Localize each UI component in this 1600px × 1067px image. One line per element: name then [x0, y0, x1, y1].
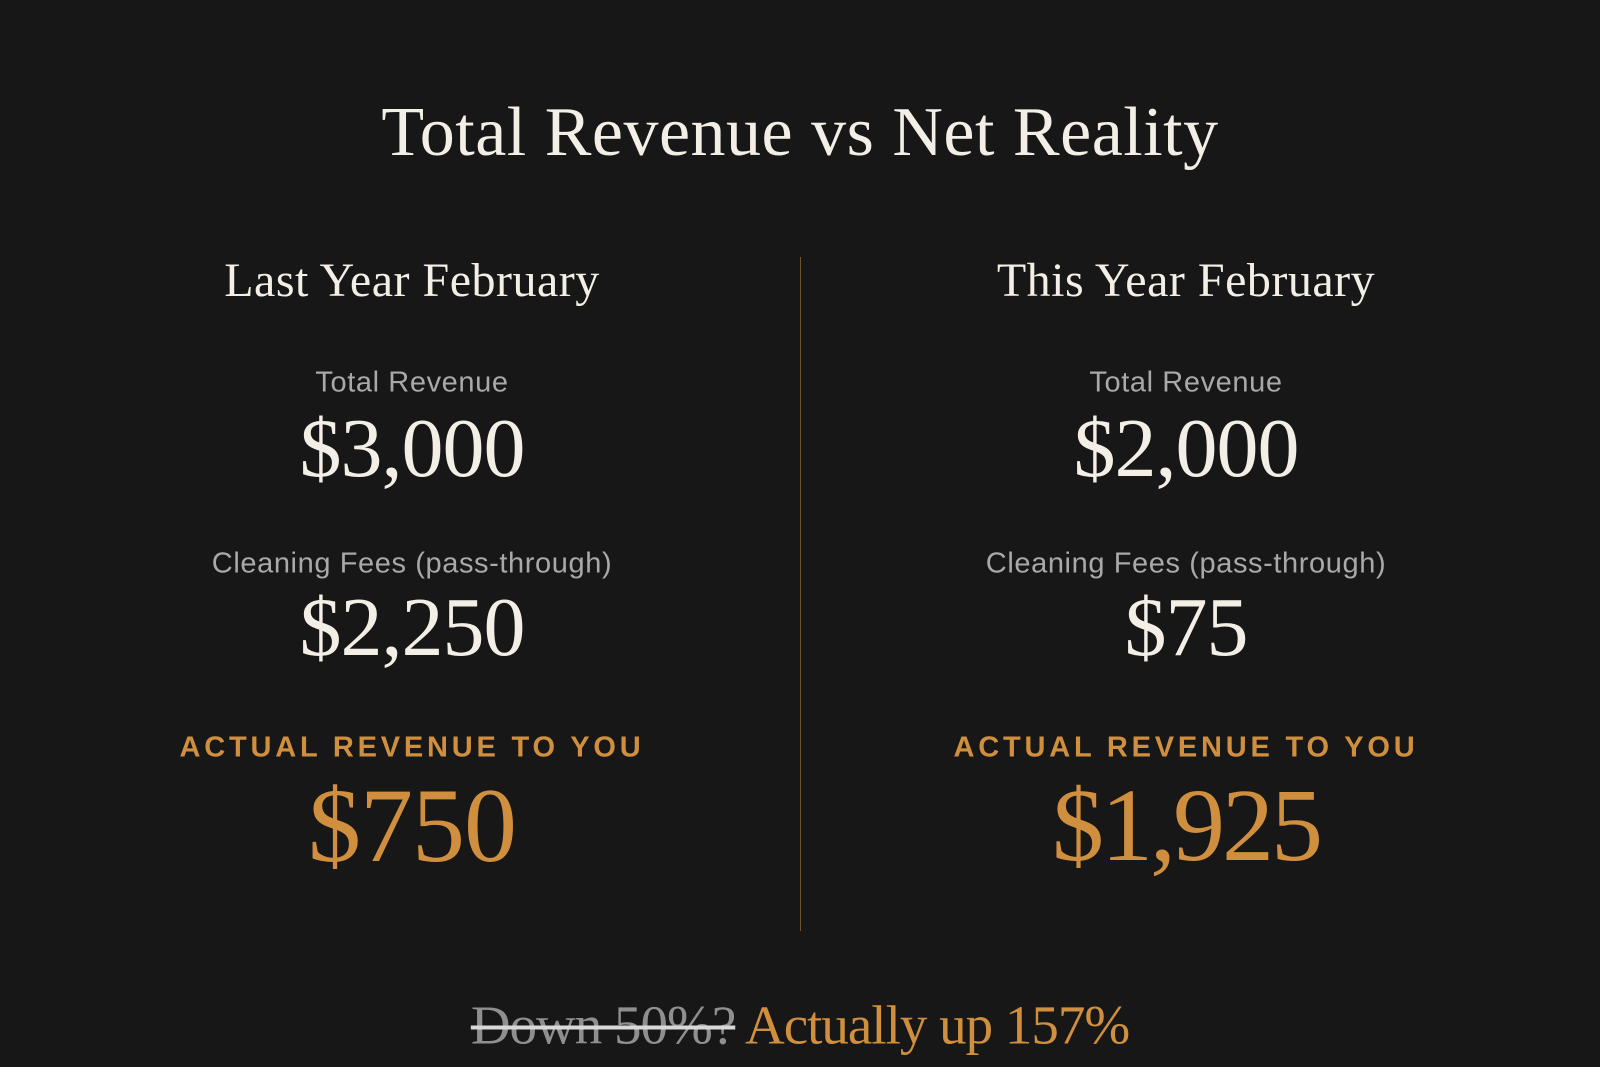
bottom callout: Down 50%? Actually up 157% — [471, 994, 1129, 1056]
divider — [800, 257, 801, 931]
value: 1925: $1,925 — [1052, 768, 1320, 883]
label: actual revenue: ACTUAL REVENUE TO YOU — [954, 732, 1418, 764]
label: cleaning fees: Cleaning Fees (pass-through) — [212, 548, 612, 580]
value: 75: $75 — [1124, 581, 1248, 674]
panel: this year — [954, 254, 1418, 883]
title: Total Revenue vs Net Reality — [381, 94, 1219, 171]
heading: last year: Last Year February — [224, 254, 600, 307]
label: total revenue: Total Revenue — [1089, 366, 1283, 398]
value: 2250: $2,250 — [300, 581, 524, 674]
value: 750: $750 — [308, 767, 516, 884]
heading: this year: This Year February — [997, 254, 1375, 307]
value: 3000: $3,000 — [300, 402, 524, 495]
label: actual revenue: ACTUAL REVENUE TO YOU — [180, 732, 644, 764]
label: total revenue: Total Revenue — [315, 366, 509, 398]
label: cleaning fees: Cleaning Fees (pass-through) — [986, 548, 1386, 580]
value: 2000: $2,000 — [1074, 402, 1298, 495]
panel: last year — [180, 254, 644, 884]
